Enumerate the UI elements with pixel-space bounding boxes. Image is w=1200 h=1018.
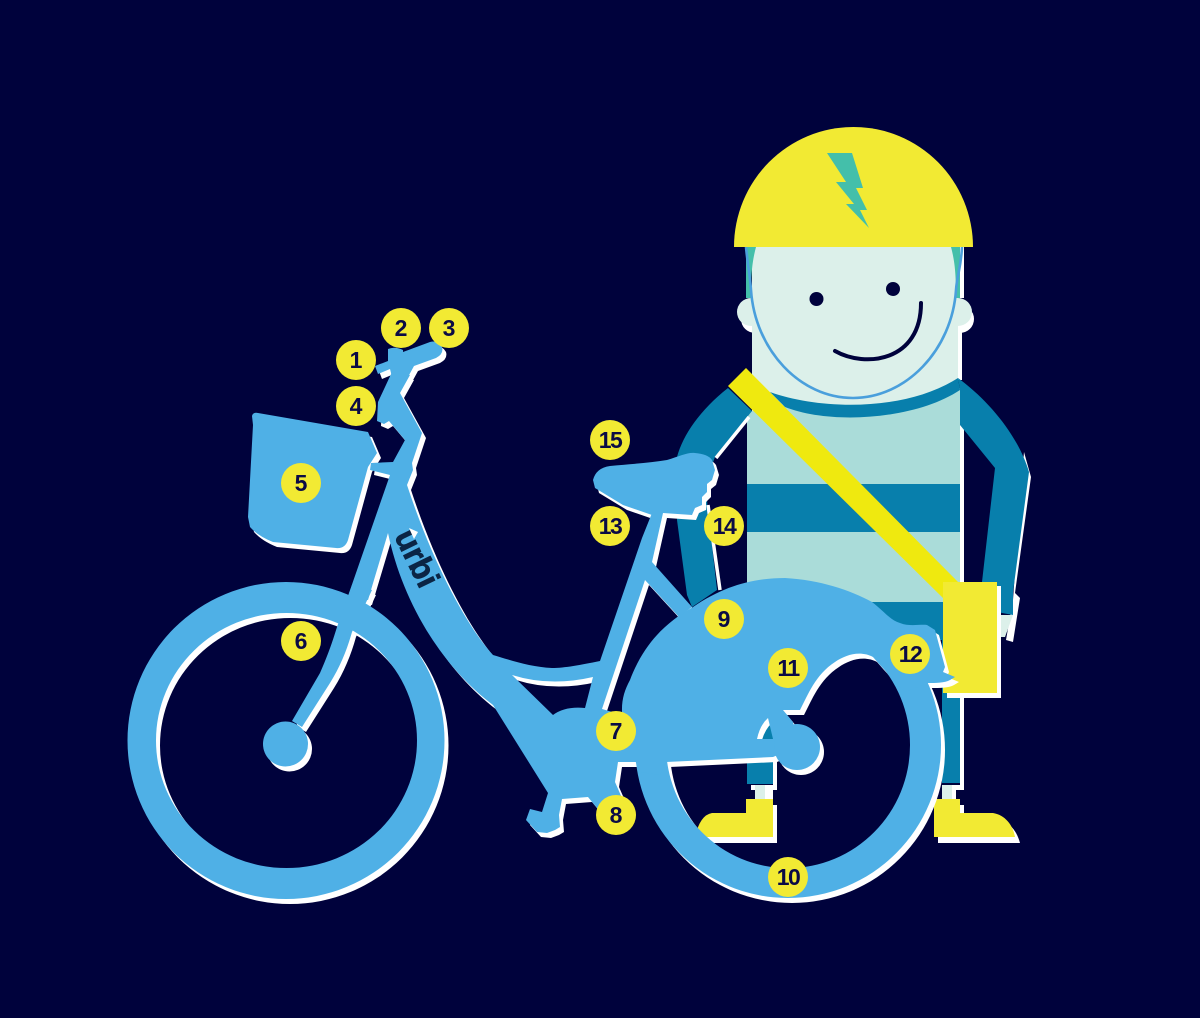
marker 10: 10 xyxy=(777,864,800,890)
lightning bolt xyxy=(827,153,869,228)
marker 12: 12 xyxy=(899,641,922,667)
marker 2 xyxy=(381,308,421,348)
hair xyxy=(746,247,960,298)
marker 7: 7 xyxy=(610,718,622,744)
logo arrow xyxy=(409,528,418,539)
right arm shadow xyxy=(1006,452,1031,642)
trousers xyxy=(747,602,960,784)
face and neck xyxy=(752,247,958,412)
left sock xyxy=(751,785,777,799)
bag xyxy=(943,582,997,693)
marker 3: 3 xyxy=(443,315,455,341)
marker 11 xyxy=(768,648,808,688)
white body shadow xyxy=(956,247,964,790)
right sock xyxy=(952,785,956,799)
shirt xyxy=(747,388,960,602)
bike shadow xyxy=(132,347,959,904)
marker 1 xyxy=(336,340,376,380)
bag shadow xyxy=(947,586,1001,698)
left shoe xyxy=(695,799,773,837)
shirt stripe xyxy=(747,484,960,532)
helmet xyxy=(734,127,973,247)
left arm highlights xyxy=(708,417,749,590)
marker 9: 9 xyxy=(718,606,730,632)
marker 4 xyxy=(336,386,376,426)
right shoe xyxy=(934,799,1015,837)
marker 5 xyxy=(281,463,321,503)
numbered markers xyxy=(281,308,930,897)
marker 15 xyxy=(590,420,630,460)
right arm xyxy=(958,378,1029,615)
left trouser edge xyxy=(773,750,777,790)
marker 8 xyxy=(596,795,636,835)
eyes xyxy=(810,282,900,306)
face outline xyxy=(746,247,962,398)
marker 5: 5 xyxy=(295,470,308,496)
marker 1: 1 xyxy=(350,347,363,373)
marker 2: 2 xyxy=(395,315,407,341)
marker 9 xyxy=(704,599,744,639)
marker 6 xyxy=(281,621,321,661)
left shoe shadow xyxy=(700,805,777,843)
marker 14: 14 xyxy=(713,513,737,539)
marker 4: 4 xyxy=(350,393,363,419)
marker 3 xyxy=(429,308,469,348)
collar xyxy=(770,378,960,417)
marker 11: 11 xyxy=(777,655,800,681)
right shoe shadow xyxy=(938,805,1020,843)
marker 8: 8 xyxy=(610,802,623,828)
marker 12 xyxy=(890,634,930,674)
marker 15: 15 xyxy=(599,427,623,453)
left arm xyxy=(677,388,752,607)
marker 7 xyxy=(596,711,636,751)
person xyxy=(677,127,1031,843)
smile xyxy=(835,303,921,359)
marker 10 xyxy=(768,857,808,897)
marker 13 xyxy=(590,506,630,546)
bike body xyxy=(128,342,955,899)
bicycle xyxy=(128,342,959,904)
urbi logo: urbi xyxy=(388,523,447,593)
strap xyxy=(728,368,960,600)
marker 14 xyxy=(704,506,744,546)
hand xyxy=(997,615,1013,637)
marker 6: 6 xyxy=(295,628,307,654)
ears xyxy=(737,298,974,333)
marker 13: 13 xyxy=(599,513,622,539)
